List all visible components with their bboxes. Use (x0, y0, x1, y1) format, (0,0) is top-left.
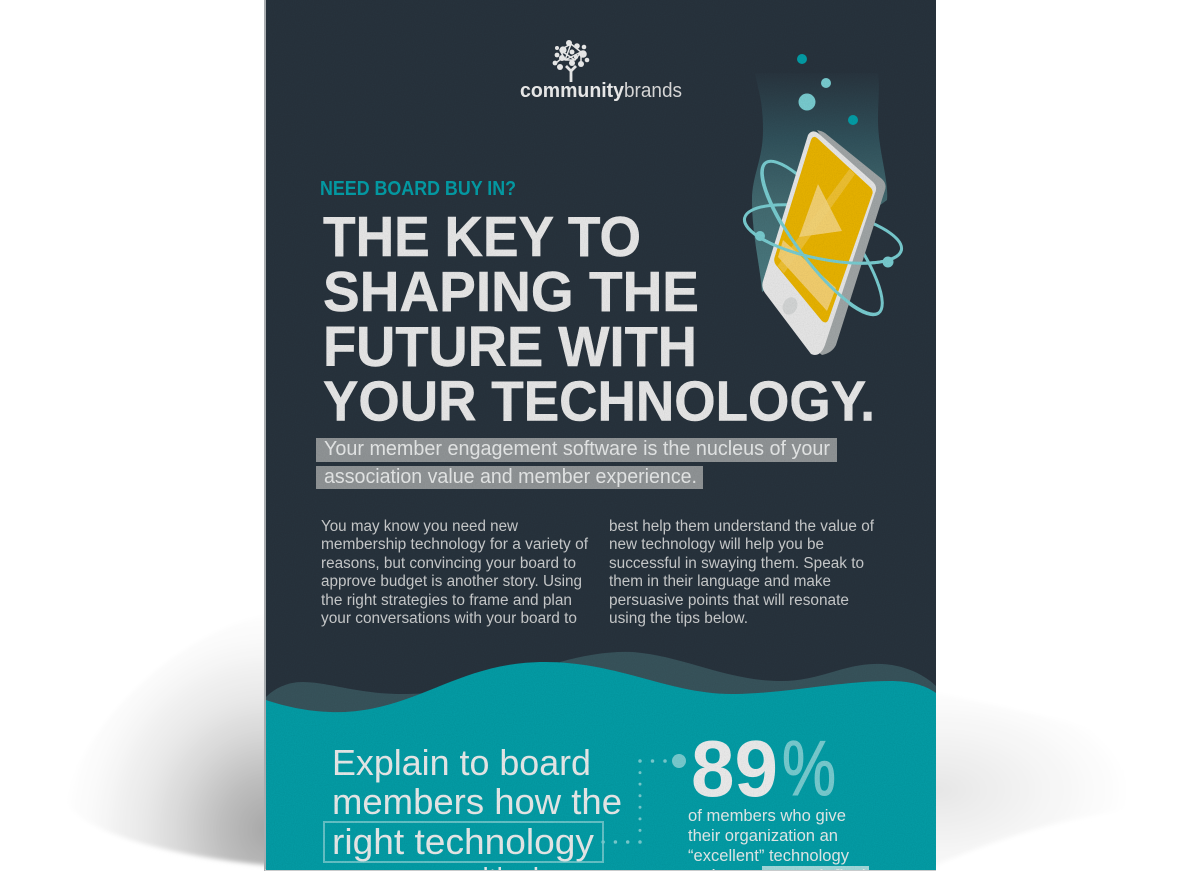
intro text left column: your conversations with your board to (321, 610, 577, 627)
intro text right column: using the tips below. (609, 610, 748, 627)
subtitle highlighted: Your member engagement software is the nucleus of your (324, 438, 830, 460)
stat: 89%: 89 (691, 724, 778, 813)
teal section heading: right technology (332, 821, 594, 862)
back wave right (560, 652, 936, 694)
intro text right column: new technology will help you be (609, 536, 824, 553)
phone screen (774, 137, 873, 322)
screen highlights (776, 167, 858, 311)
page edge (264, 0, 266, 871)
title: THE KEY TO (323, 205, 641, 268)
title: YOUR TECHNOLOGY. (323, 370, 875, 432)
home button (780, 295, 800, 317)
teal section heading: Explain to board (332, 742, 591, 783)
subtitle highlighted: association value and member experience. (324, 466, 697, 488)
title: FUTURE WITH (323, 315, 697, 378)
intro text left column (321, 518, 589, 627)
intro text right column: persuasive points that will resonate (609, 592, 849, 609)
dotted connector (602, 761, 668, 842)
stat: 89% (694, 740, 834, 797)
logo wordmark: community (520, 80, 625, 102)
panel: dark cover (266, 0, 936, 870)
subtitle highlighted (316, 438, 837, 489)
logo icon: tree (553, 40, 589, 82)
teal section heading (324, 742, 622, 871)
orbit nodes (755, 231, 765, 241)
illustration: phone with orbits (740, 54, 906, 355)
title (323, 205, 875, 432)
stat caption: their organization an (688, 827, 838, 845)
floating dots (797, 54, 858, 125)
title: SHAPING THE (323, 260, 699, 323)
stat caption: of members who give (688, 807, 846, 825)
left drop shadow (101, 650, 264, 868)
logo (520, 40, 682, 102)
eyebrow: NEED BOARD BUY IN? (320, 178, 516, 200)
stat: 89%: % (782, 724, 836, 812)
paper grain (266, 0, 936, 870)
intro text left column: membership technology for a variety of (321, 536, 589, 553)
intro text left column: reasons, but convincing your board to (321, 555, 576, 572)
glow behind phone (752, 73, 887, 292)
stat caption (688, 807, 869, 871)
intro text left column: You may know you need new (321, 518, 519, 535)
intro text right column (609, 518, 875, 627)
orbits back (740, 147, 906, 329)
stat caption: “excellent” technology (688, 847, 850, 865)
intro text right column: successful in swaying them. Speak to (609, 555, 864, 572)
intro text right column: them in their language and make (609, 573, 831, 590)
intro text right column: best help them understand the value of (609, 518, 875, 535)
logo: brands (624, 80, 682, 102)
orbits front (744, 163, 901, 314)
highlight box (324, 822, 603, 862)
back wave left (266, 682, 421, 712)
right drop shadow (936, 722, 1064, 860)
panel: teal wave section (266, 652, 936, 870)
intro text left column: approve budget is another story. Using (321, 573, 582, 590)
teal wave (266, 662, 936, 870)
connector node (672, 754, 686, 768)
intro text left column: the right strategies to frame and plan (321, 592, 572, 609)
teal section heading: members how the (332, 781, 622, 822)
phone body (812, 130, 886, 355)
